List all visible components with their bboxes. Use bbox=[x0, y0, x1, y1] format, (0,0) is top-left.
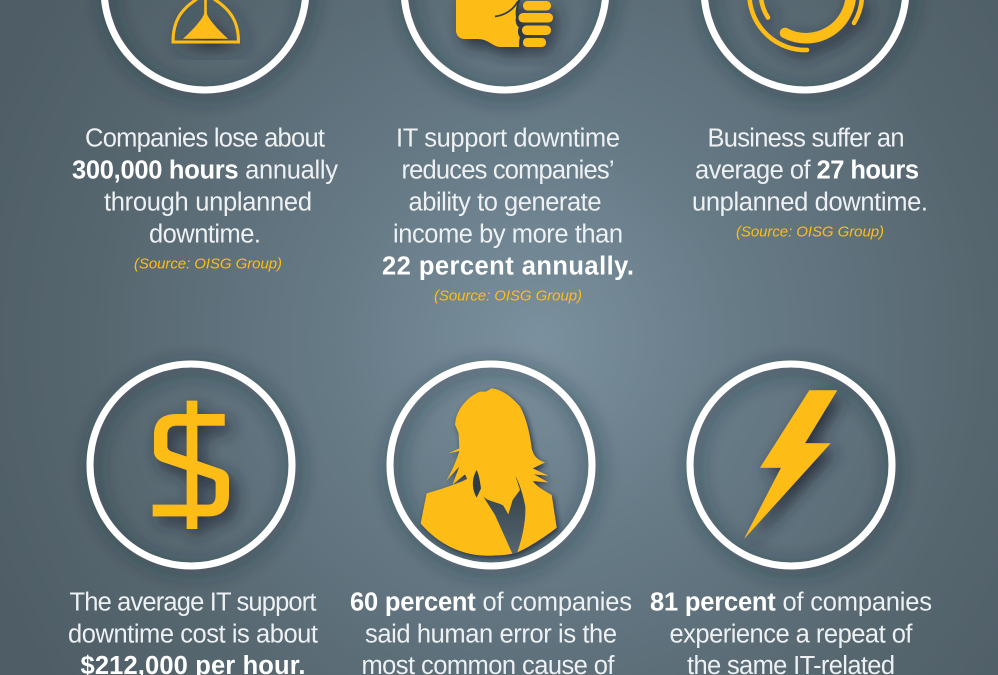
panel: income reduction bbox=[382, 0, 634, 304]
ring: lost hours bbox=[104, 0, 306, 90]
icon: circular arcs bbox=[750, 0, 862, 50]
icon: fist bbox=[456, 0, 553, 47]
icon: lightning bolt bbox=[744, 390, 837, 539]
text: human error: 60 percent of companies bbox=[350, 588, 632, 616]
panel: hourly cost: downtime cost is about bbox=[68, 620, 318, 648]
panel: repeat failures bbox=[650, 364, 932, 675]
text: income reduction: IT support downtime bbox=[396, 124, 620, 152]
ring: hourly cost bbox=[90, 364, 292, 566]
panel: human error bbox=[350, 364, 632, 675]
panel: downtime average bbox=[692, 0, 928, 240]
ring: human error bbox=[390, 364, 592, 566]
text: downtime average: Business suffer an bbox=[708, 124, 904, 152]
icon: dollar sign bbox=[153, 401, 229, 529]
panel: lost hours: 300,000 hours annually bbox=[72, 156, 338, 184]
panel: income reduction: 22 percent annually. bbox=[382, 252, 634, 280]
ring: repeat failures bbox=[690, 364, 892, 566]
panel: hourly cost bbox=[68, 364, 318, 675]
panel: human error: said human error is the bbox=[365, 620, 617, 648]
ring: income reduction bbox=[404, 0, 606, 90]
panel: income reduction: reduces companies’ bbox=[402, 156, 614, 184]
icon: hourglass bbox=[173, 0, 238, 42]
panel: lost hours: (Source: OISG Group) bbox=[134, 256, 282, 272]
panel: downtime average: (Source: OISG Group) bbox=[736, 224, 884, 240]
panel: downtime average: unplanned downtime. bbox=[692, 188, 928, 216]
panel: lost hours: through unplanned bbox=[104, 188, 312, 216]
panel: repeat failures: experience a repeat of bbox=[670, 620, 913, 648]
panel: lost hours: downtime. bbox=[149, 220, 261, 248]
panel: lost hours bbox=[72, 0, 338, 272]
panel: income reduction: (Source: OISG Group) bbox=[434, 288, 582, 304]
text: lost hours: Companies lose about bbox=[85, 124, 325, 152]
text: repeat failures: 81 percent of companies bbox=[650, 588, 932, 616]
panel: income reduction: ability to generate bbox=[408, 188, 602, 216]
icon: person silhouette bbox=[421, 388, 557, 556]
panel: downtime average: average of 27 hours bbox=[695, 156, 919, 184]
ring: downtime average bbox=[704, 0, 906, 90]
panel: income reduction: income by more than bbox=[393, 220, 623, 248]
text: hourly cost: The average IT support bbox=[70, 588, 316, 616]
